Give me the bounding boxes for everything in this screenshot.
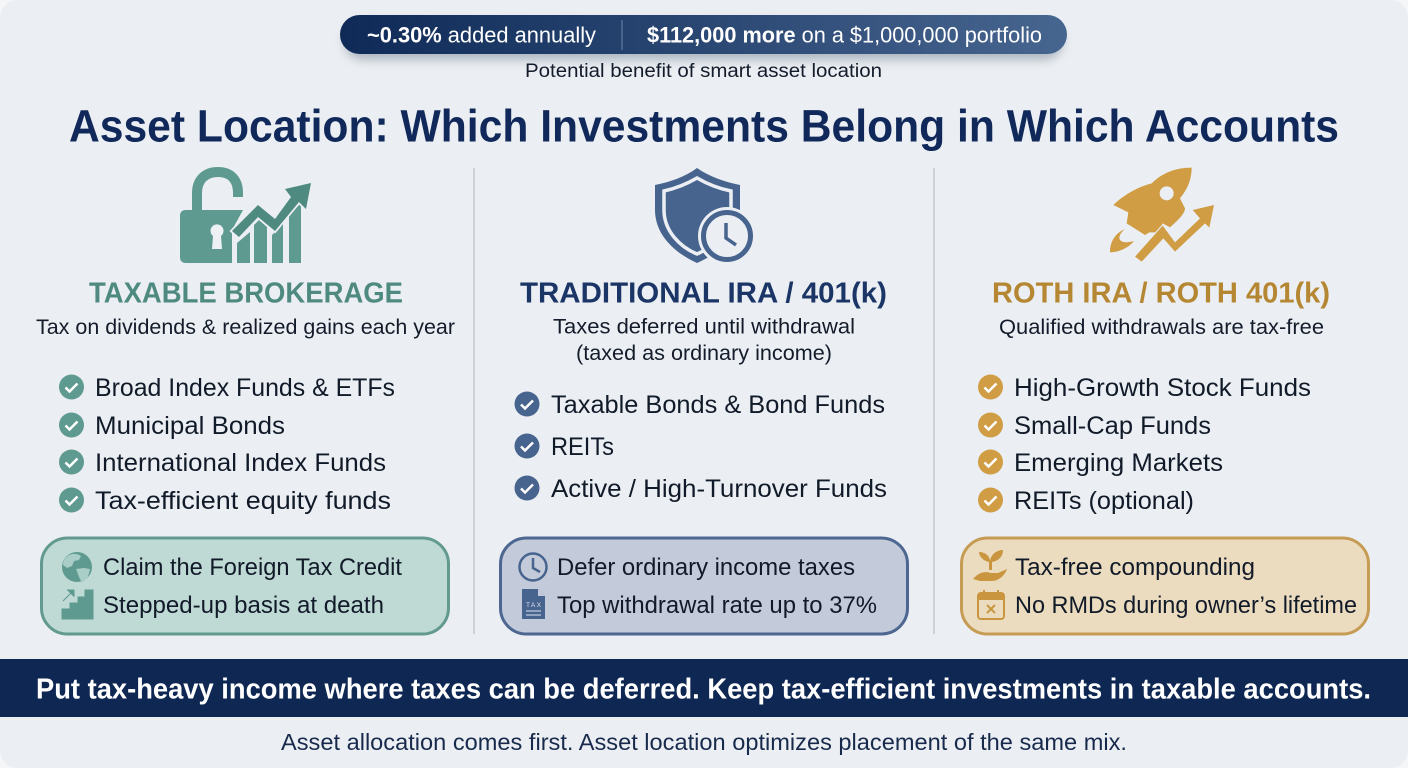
checklist: International Index Funds [95, 449, 386, 477]
description: (taxed as ordinary income) [576, 342, 832, 365]
checklist: REITs [551, 433, 614, 461]
description [553, 316, 855, 365]
callout: Claim the Foreign Tax Credit [103, 554, 402, 581]
checklist: Active / High-Turnover Funds [551, 475, 887, 503]
icon: rocket and arrow [1110, 168, 1214, 262]
pill caption: Potential benefit of smart asset location [525, 61, 882, 82]
heading: ROTH IRA / ROTH 401(k) [992, 278, 1330, 310]
description: Tax on dividends & realized gains each year [36, 316, 455, 339]
checklist: High-Growth Stock Funds [1014, 374, 1311, 402]
icon: clock [520, 554, 546, 580]
checklist: Small-Cap Funds [1014, 412, 1211, 440]
panel: traditional ira [500, 168, 908, 634]
icon: tax document: TAX [526, 602, 542, 609]
checklist: Tax-efficient equity funds [95, 487, 391, 515]
benefit pill [340, 15, 1067, 60]
callout: Top withdrawal rate up to 37% [557, 592, 877, 619]
benefit pill: $112,000 more on a $1,000,000 portfolio [647, 22, 1042, 48]
callout [500, 538, 908, 634]
callout: No RMDs during owner’s lifetime [1015, 592, 1357, 619]
footer note: Asset allocation comes first. Asset location optimizes placement of the same mix. [281, 729, 1127, 755]
icon: lock and growth chart [180, 172, 311, 263]
icon: calendar with x [978, 590, 1004, 619]
callout [42, 538, 448, 634]
checklist [978, 374, 1311, 515]
checklist: Taxable Bonds & Bond Funds [551, 391, 885, 419]
title: Asset Location: Which Investments Belong in Which Accounts [69, 100, 1339, 152]
callout [962, 538, 1368, 634]
heading: TRADITIONAL IRA / 401(k) [520, 278, 887, 310]
heading: TAXABLE BROKERAGE [89, 278, 403, 310]
checklist [59, 374, 395, 515]
icon: tax document [522, 589, 545, 619]
description: Taxes deferred until withdrawal [553, 316, 855, 338]
checklist: Emerging Markets [1014, 449, 1223, 477]
icon: stairs [62, 590, 93, 619]
checklist [514, 391, 887, 503]
callout: Tax-free compounding [1015, 554, 1255, 581]
icon: shield and clock [655, 168, 756, 265]
icon: globe [62, 552, 92, 583]
checklist: Broad Index Funds & ETFs [95, 374, 395, 402]
checklist: Municipal Bonds [95, 412, 285, 440]
callout: Defer ordinary income taxes [557, 554, 855, 581]
panel: roth ira [962, 168, 1368, 634]
panel: taxable brokerage [36, 172, 455, 634]
callout: Stepped-up basis at death [103, 592, 384, 619]
icon: plant in hand [973, 550, 1007, 581]
description: Qualified withdrawals are tax-free [999, 316, 1324, 339]
checklist: REITs (optional) [1014, 487, 1194, 515]
takeaway banner [0, 659, 1408, 717]
benefit pill: ~0.30% added annually [367, 22, 596, 48]
